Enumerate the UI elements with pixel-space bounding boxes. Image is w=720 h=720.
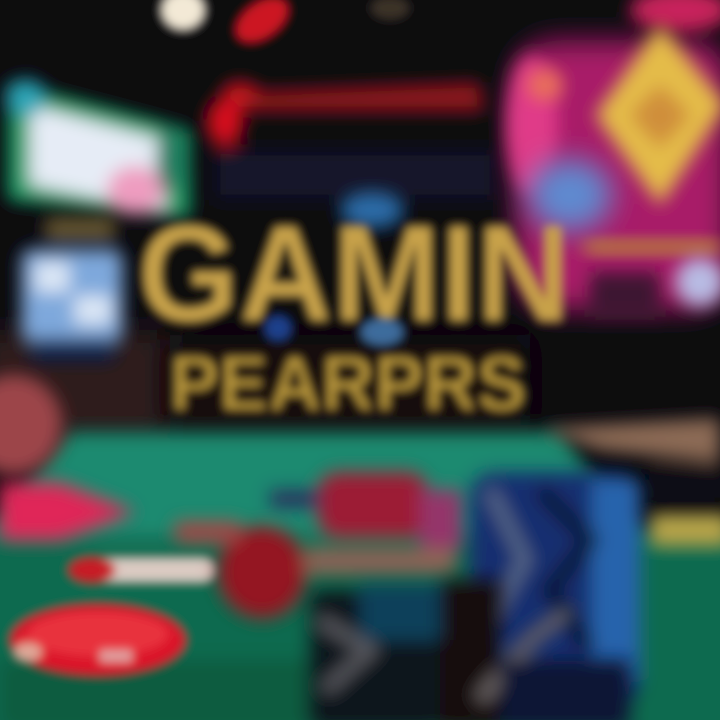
subheading: PEARPRS — [170, 339, 526, 427]
stack of blue poker chips — [470, 472, 640, 702]
pink felt patch — [0, 483, 135, 540]
monitor: green and white screen — [6, 80, 190, 218]
small red and white chip — [68, 557, 215, 583]
headline: GAMIN — [138, 197, 570, 351]
green gaming table — [0, 432, 720, 720]
red ball on left — [0, 375, 62, 475]
blue gems under headline — [264, 315, 404, 346]
phone with blue screen — [22, 218, 122, 360]
blue glow above headline — [340, 192, 404, 228]
stack of dark poker chips — [310, 580, 630, 720]
large red poker chip — [10, 604, 186, 676]
yellow strip on table — [650, 514, 720, 546]
red neon sign — [207, 82, 495, 200]
ceiling lights — [161, 0, 410, 52]
tan arm on right — [540, 418, 720, 497]
pink and gold slot display — [506, 0, 720, 317]
stack of red poker chips — [175, 472, 462, 618]
